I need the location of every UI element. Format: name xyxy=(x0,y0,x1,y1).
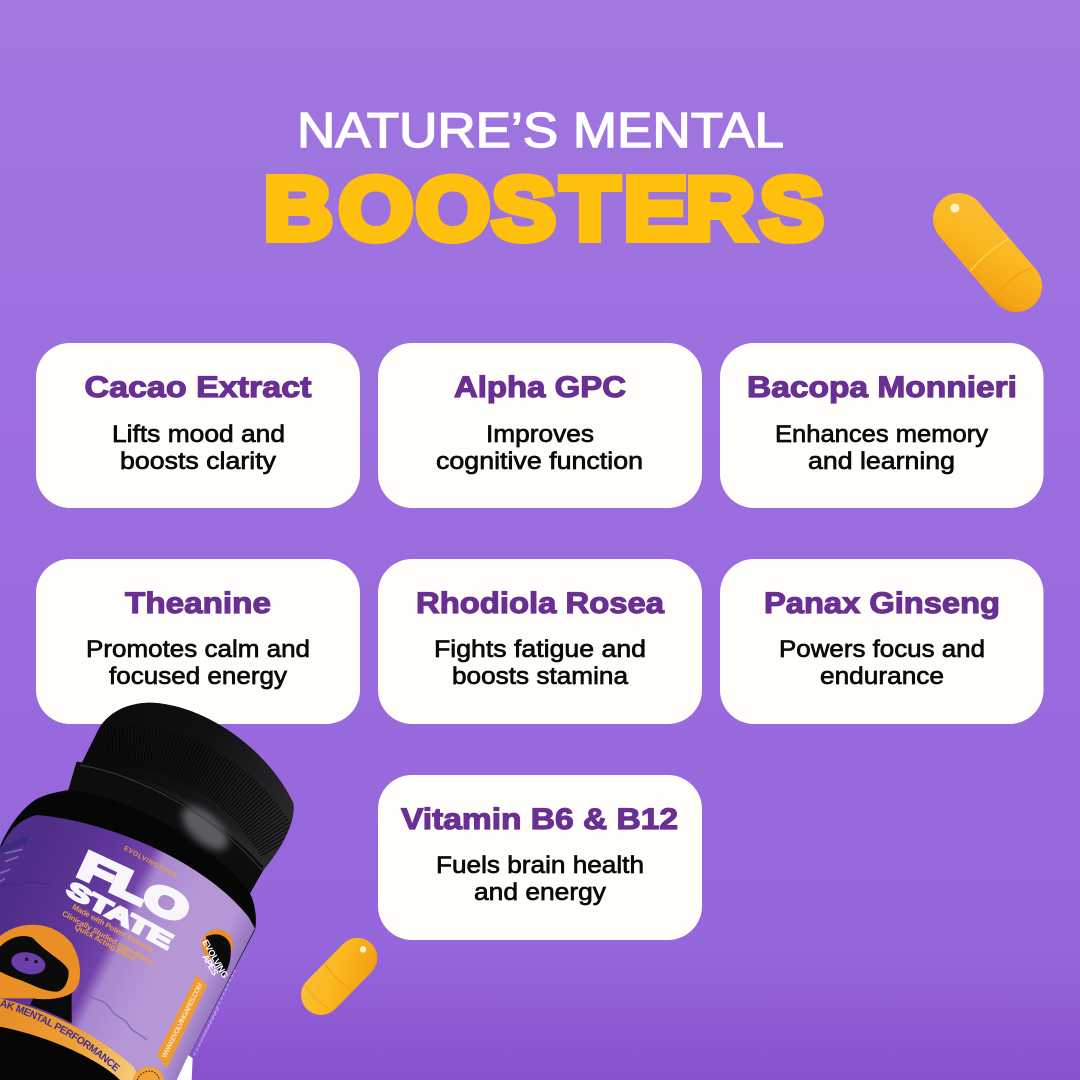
card: Theanine: Theanine xyxy=(125,587,271,620)
mascot on label xyxy=(0,925,80,1023)
card: Alpha GPC xyxy=(378,343,702,508)
card: Bacopa Monnieri xyxy=(720,343,1044,508)
title xyxy=(264,104,823,258)
label barcode patch and seal xyxy=(133,1055,193,1080)
bottle cap xyxy=(68,703,294,873)
bottle neck xyxy=(68,762,263,893)
card: Bacopa Monnieri: Enhances memory xyxy=(775,421,988,448)
icon: supplement bottle: AK MENTAL PERFORMANCE xyxy=(0,1000,120,1072)
title line: Nature's Mental: NATURE’S MENTAL xyxy=(297,104,784,158)
card: Theanine: focused energy xyxy=(109,663,287,690)
icon: capsule top right xyxy=(922,182,1053,323)
bottle silhouette xyxy=(0,703,294,1080)
website tag: WWW.EVOLVINGAPES.COM xyxy=(161,982,204,1059)
title line: Boosters: BOOSTERS xyxy=(264,160,823,258)
card: Alpha GPC: cognitive function xyxy=(436,448,643,475)
card: Rhodiola Rosea: Rhodiola Rosea xyxy=(416,587,664,620)
card: Cacao Extract: boosts clarity xyxy=(120,448,276,475)
card: Panax Ginseng: Powers focus and xyxy=(779,636,985,663)
card: Panax Ginseng: endurance xyxy=(820,663,944,690)
band slogan xyxy=(0,1006,117,1073)
brand logo on label: APES xyxy=(200,953,220,977)
card: Rhodiola Rosea: Fights fatigue and xyxy=(434,636,646,663)
card: Vitamin B6 & B12: and energy xyxy=(474,879,606,906)
card: Cacao Extract: Cacao Extract xyxy=(84,371,312,404)
card: Theanine: Promotes calm and xyxy=(86,636,310,663)
brand logo on label: EVOLVING xyxy=(200,938,230,980)
card: Bacopa Monnieri: and learning xyxy=(808,448,955,475)
brand name on label: EVOLVINGAPES xyxy=(122,845,178,880)
label fine print xyxy=(193,970,235,1057)
card: Vitamin B6 & B12: Fuels brain health xyxy=(436,852,644,879)
product name STATE: STATE xyxy=(63,876,177,954)
card: Rhodiola Rosea xyxy=(378,559,702,724)
icon: supplement bottle xyxy=(0,702,294,1080)
card: Vitamin B6 & B12 xyxy=(378,775,702,940)
icon: small capsule xyxy=(293,930,386,1023)
card: Theanine xyxy=(36,559,360,724)
card: Vitamin B6 & B12: Vitamin B6 & B12 xyxy=(401,803,678,836)
label squiggle lines xyxy=(0,882,147,1040)
label claims: Quick Acting Blend xyxy=(73,922,137,963)
card: Rhodiola Rosea: boosts stamina xyxy=(452,663,629,690)
card: Panax Ginseng xyxy=(720,559,1044,724)
card: Alpha GPC: Improves xyxy=(486,421,594,448)
card: Cacao Extract: Lifts mood and xyxy=(112,421,285,448)
label ingredient tag and dose list xyxy=(0,835,31,882)
label claims: Made with Potent Extracts xyxy=(71,902,155,955)
card: Alpha GPC: Alpha GPC xyxy=(454,371,626,404)
orange band xyxy=(0,998,140,1080)
card: Cacao Extract xyxy=(36,343,360,508)
bottle label xyxy=(0,815,255,1080)
product name FLO: FLO xyxy=(72,844,196,932)
card: Bacopa Monnieri: Bacopa Monnieri xyxy=(747,371,1017,404)
label claims: Clinically Studied Ingredients xyxy=(61,909,155,967)
card: Panax Ginseng: Panax Ginseng xyxy=(764,587,1000,620)
